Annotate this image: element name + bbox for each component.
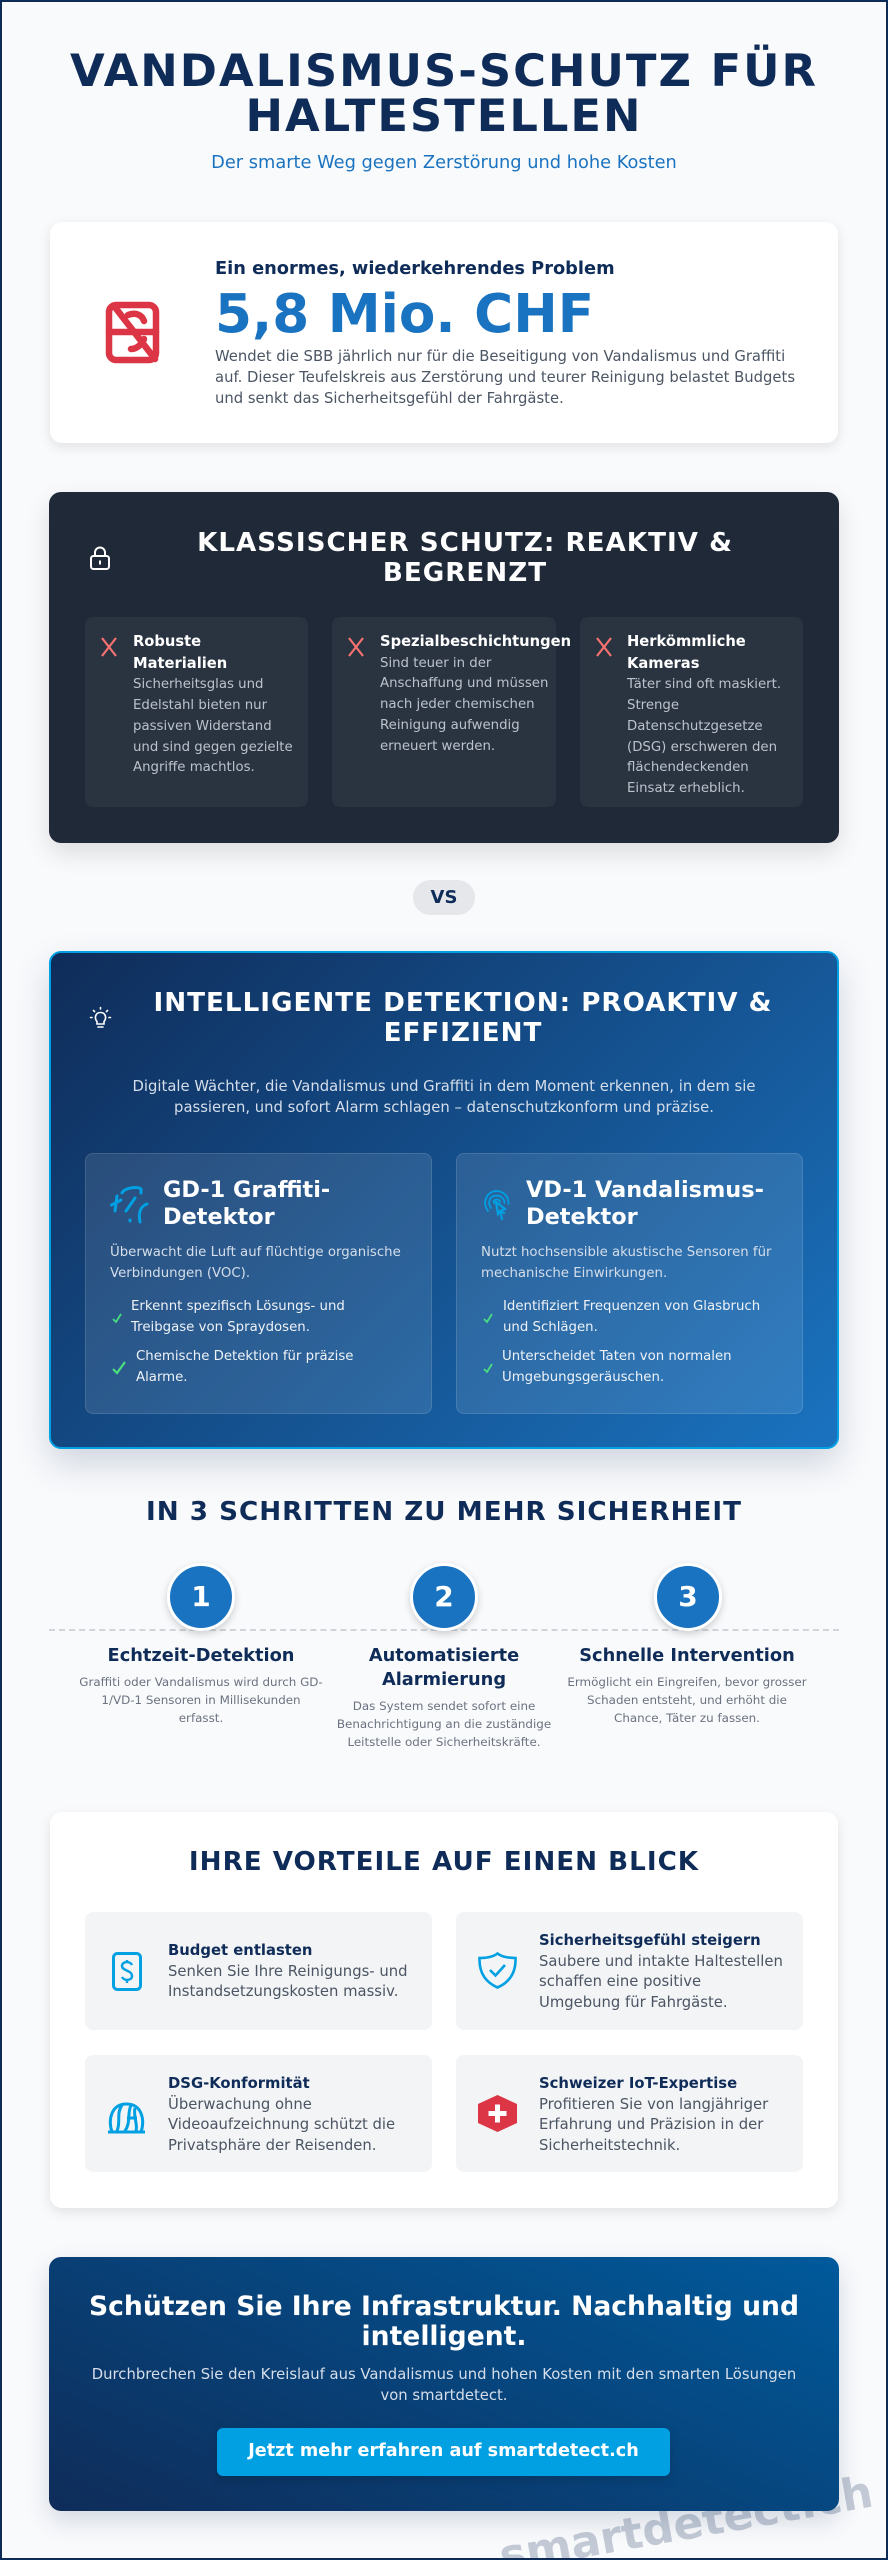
- check item: Erkennt spezifisch Lösungs- und: [131, 1299, 345, 1314]
- card text: Anschaffung und müssen: [380, 676, 548, 691]
- benefit text: schaffen eine positive: [539, 1973, 701, 1990]
- card: conventional cameras: [580, 617, 803, 807]
- card text: passiven Widerstand: [133, 719, 272, 734]
- panel: benefits: [50, 1812, 838, 2208]
- step 3 text: [567, 1675, 807, 1725]
- card text: Täter sind oft maskiert.: [627, 677, 781, 692]
- classic heading: [197, 528, 733, 588]
- benefit text: DSG-Konformität: [168, 2075, 310, 2092]
- check item: [112, 1299, 345, 1335]
- number circle 3: [654, 1563, 722, 1631]
- card text: erneuert werden.: [380, 739, 495, 754]
- check item: Umgebungsgeräuschen.: [502, 1370, 664, 1385]
- GD-1 text: Verbindungen (VOC).: [110, 1266, 250, 1281]
- card: robust materials: [85, 617, 308, 807]
- vs badge: [413, 880, 475, 915]
- step 2: [337, 1566, 551, 1749]
- big number: 5,8 Mio. CHF: [215, 283, 594, 345]
- check item: [484, 1299, 760, 1335]
- timeline dashed line: [49, 1629, 839, 1631]
- card text: Spezialbeschichtungen: [380, 633, 571, 650]
- step 1 text: [79, 1675, 323, 1725]
- benefit text: Saubere und intakte Haltestellen: [539, 1953, 783, 1970]
- icon: lock: [90, 546, 110, 570]
- VD-1 heading: Detektor: [526, 1204, 638, 1230]
- benefits heading: IHRE VORTEILE AUF EINEN BLICK: [189, 1847, 699, 1877]
- vs badge: VS: [431, 887, 457, 908]
- check item: Alarme.: [136, 1370, 188, 1385]
- icon: swiss hexagon: [478, 2095, 517, 2132]
- intelligent heading: [153, 988, 773, 1048]
- step 3 text: Schaden entsteht, und erhöht die: [587, 1693, 787, 1707]
- benefit text: Videoaufzeichnung schützt die: [168, 2116, 395, 2133]
- step 1 text: 1/VD-1 Sensoren in Millisekunden: [101, 1693, 301, 1707]
- panel: classic protection: [49, 492, 839, 843]
- intro text: [133, 1078, 755, 1116]
- icon: shield check: [478, 1952, 517, 1989]
- icon: cross: [348, 637, 364, 657]
- cta heading: intelligent.: [362, 2321, 526, 2352]
- step 1 text: Graffiti oder Vandalismus wird durch GD-: [79, 1675, 323, 1689]
- benefit text: [539, 2075, 768, 2154]
- GD-1 text: Überwacht die Luft auf flüchtige organische: [110, 1245, 401, 1260]
- check item: und Schlägen.: [503, 1320, 598, 1335]
- steps heading: IN 3 SCHRITTEN ZU MEHR SICHERHEIT: [146, 1497, 742, 1527]
- card text: Materialien: [133, 655, 227, 672]
- benefit text: Schweizer IoT-Expertise: [539, 2075, 737, 2092]
- problem text: und senkt das Sicherheitsgefühl der Fahrgäste.: [215, 390, 564, 407]
- step 1 text: erfasst.: [179, 1711, 223, 1725]
- problem text: auf. Dieser Teufelskreis aus Zerstörung und teurer Reinigung belastet Budgets: [215, 369, 795, 386]
- VD-1 text: Nutzt hochsensible akustische Sensoren für: [481, 1245, 771, 1260]
- number circle 3: 3: [678, 1580, 698, 1613]
- card text: Einsatz erheblich.: [627, 781, 745, 796]
- card: VD-1: [456, 1153, 803, 1414]
- VD-1 text: mechanische Einwirkungen.: [481, 1266, 667, 1281]
- card text: nach jeder chemischen: [380, 697, 535, 712]
- benefit text: Erfahrung und Präzision in der: [539, 2116, 763, 2133]
- problem text: Wendet die SBB jährlich nur für die Beseitigung von Vandalismus und Graffiti: [215, 348, 785, 365]
- subtitle: Der smarte Weg gegen Zerstörung und hohe Kosten: [211, 152, 677, 173]
- card text: [626, 633, 781, 796]
- icon: graffiti spray: [110, 1186, 148, 1224]
- VD-1 heading: VD-1 Vandalismus-: [526, 1177, 764, 1203]
- step 2 text: Benachrichtigung an die zuständige: [337, 1717, 551, 1731]
- intro text: Digitale Wächter, die Vandalismus und Graffiti in dem Moment erkennen, in dem sie: [133, 1078, 755, 1095]
- icon: cross: [101, 637, 117, 657]
- benefit: DSG: [85, 2055, 432, 2172]
- card text: Reinigung aufwendig: [380, 718, 520, 733]
- panel: call to action: [49, 2257, 839, 2511]
- title: VANDALISMUS-SCHUTZ FÜR: [70, 44, 818, 97]
- icon: broken window: [106, 302, 160, 364]
- card: GD-1: [85, 1153, 432, 1414]
- panel: problem: [50, 222, 838, 443]
- card text: Herkömmliche: [627, 633, 746, 650]
- title: HALTESTELLEN: [245, 89, 643, 142]
- cta button: Jetzt mehr erfahren auf smartdetect.ch: [248, 2441, 639, 2461]
- GD-1 heading: Detektor: [163, 1204, 275, 1230]
- problem heading: Ein enormes, wiederkehrendes Problem: [215, 258, 615, 279]
- benefit text: Überwachung ohne: [168, 2096, 312, 2113]
- step 3 text: Ermöglicht ein Eingreifen, bevor grosser: [567, 1675, 807, 1689]
- benefit text: Senken Sie Ihre Reinigungs- und: [168, 1963, 407, 1980]
- VD-1 text: [481, 1245, 772, 1281]
- step 1: [79, 1566, 323, 1725]
- intelligent heading: INTELLIGENTE DETEKTION: PROAKTIV &: [153, 988, 773, 1018]
- benefit text: Instandsetzungskosten massiv.: [168, 1983, 398, 2000]
- benefit text: [539, 1932, 783, 2011]
- icon: sound waves cursor: [484, 1190, 510, 1220]
- step 2 title: Alarmierung: [382, 1669, 506, 1690]
- number circle 1: 1: [191, 1580, 211, 1613]
- step 2 title: Automatisierte: [369, 1645, 519, 1666]
- step 2 text: Leitstelle oder Sicherheitskräfte.: [347, 1735, 541, 1749]
- classic heading: KLASSISCHER SCHUTZ: REAKTIV &: [197, 528, 733, 558]
- card text: Strenge: [627, 698, 679, 713]
- benefit text: [168, 2075, 395, 2154]
- check item: Treibgase von Spraydosen.: [131, 1320, 310, 1335]
- intro text: passieren, und sofort Alarm schlagen – datenschutzkonform und präzise.: [174, 1099, 714, 1116]
- card: special coatings: [332, 617, 556, 807]
- step 3: [567, 1566, 807, 1725]
- GD-1 text: [110, 1244, 401, 1281]
- problem text: [215, 348, 795, 407]
- step 2 text: Das System sendet sofort eine: [353, 1699, 535, 1713]
- number circle 2: 2: [434, 1580, 454, 1613]
- benefit: safety: [456, 1912, 803, 2030]
- number circle 2: [410, 1563, 478, 1631]
- panel: intelligent detection: [49, 951, 839, 1449]
- icon: dollar: [112, 1952, 142, 1991]
- step 3 text: Chance, Täter zu fassen.: [614, 1711, 760, 1725]
- benefit: budget: [85, 1912, 432, 2030]
- benefit text: Umgebung für Fahrgäste.: [539, 1994, 728, 2011]
- classic heading: BEGRENZT: [383, 558, 547, 588]
- step 2 title: [369, 1645, 519, 1690]
- cta text: Durchbrechen Sie den Kreislauf aus Vandalismus und hohen Kosten mit den smarten Lösungen: [92, 2366, 796, 2383]
- card text: Angriffe machtlos.: [133, 760, 255, 775]
- card text: Robuste: [133, 633, 201, 650]
- GD-1 heading: [163, 1177, 330, 1230]
- number circle 1: [167, 1563, 235, 1631]
- card text: flächendeckenden: [627, 760, 749, 775]
- benefit: Swiss expertise: [456, 2055, 803, 2172]
- benefit text: Privatsphäre der Reisenden.: [168, 2137, 376, 2154]
- step 1 title: Echtzeit-Detektion: [108, 1645, 294, 1666]
- card text: Datenschutzgesetze: [627, 719, 763, 734]
- cta heading: Schützen Sie Ihre Infrastruktur. Nachhaltig und: [89, 2291, 799, 2322]
- benefit text: [168, 1942, 407, 2000]
- card text: Sind teuer in der: [380, 656, 491, 671]
- icon: light bulb: [90, 1006, 112, 1028]
- icon: privacy globe: [108, 2102, 145, 2134]
- card text: Edelstahl bieten nur: [133, 698, 267, 713]
- check item: [484, 1349, 732, 1385]
- cta text: von smartdetect.: [380, 2387, 508, 2404]
- intelligent heading: EFFIZIENT: [384, 1018, 542, 1048]
- card text: Sicherheitsglas und: [133, 677, 263, 692]
- card text: und sind gegen gezielte: [133, 740, 293, 755]
- GD-1 heading: GD-1 Graffiti-: [163, 1177, 330, 1203]
- benefit text: Sicherheitstechnik.: [539, 2137, 680, 2154]
- VD-1 heading: [526, 1177, 764, 1230]
- benefit text: Sicherheitsgefühl steigern: [539, 1932, 761, 1949]
- benefit text: Budget entlasten: [168, 1942, 312, 1959]
- card text: [380, 633, 571, 754]
- cta button: [217, 2428, 670, 2476]
- title: [70, 44, 818, 142]
- check item: [112, 1349, 353, 1385]
- check item: Unterscheidet Taten von normalen: [502, 1349, 732, 1364]
- cta text: [49, 2365, 839, 2406]
- card text: (DSG) erschweren den: [627, 740, 777, 755]
- card text: Kameras: [627, 655, 699, 672]
- step 2 text: [337, 1699, 551, 1749]
- icon: cross: [596, 637, 612, 657]
- check item: Chemische Detektion für präzise: [136, 1349, 353, 1364]
- card text: [133, 633, 293, 775]
- cta heading: [89, 2291, 799, 2352]
- check item: Identifiziert Frequenzen von Glasbruch: [503, 1299, 760, 1314]
- step 3 title: Schnelle Intervention: [579, 1645, 795, 1666]
- benefit text: Profitieren Sie von langjähriger: [539, 2096, 768, 2113]
